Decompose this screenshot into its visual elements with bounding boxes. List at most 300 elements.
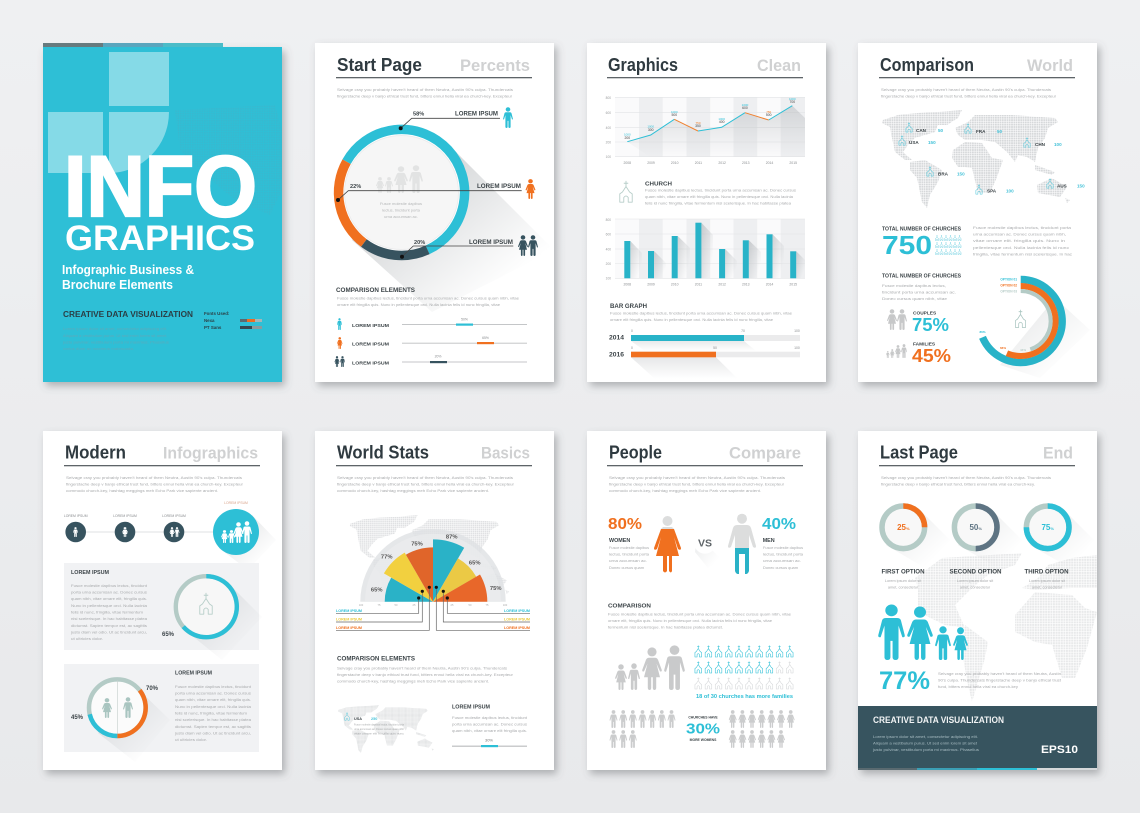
heading: Graphics <box>608 55 678 75</box>
family teal <box>878 605 968 660</box>
section text: ut ultricies dolor. <box>175 738 207 742</box>
line chart: 200 <box>606 140 611 144</box>
map markers: CHN <box>1035 142 1046 147</box>
bar chart: 200 <box>606 262 611 266</box>
callout 58% <box>399 107 513 130</box>
total text: fringilla, vitae fermentum nisi scelerisque. In hac <box>973 252 1072 256</box>
footer text: Aliquam a vestibulum purus. Ut sed enim lorem sit amet <box>873 742 978 746</box>
bar chart: 2010 <box>671 282 679 286</box>
icon: church <box>620 181 632 202</box>
panel: people <box>587 431 826 770</box>
map markers: 100 <box>1006 188 1014 194</box>
family icon in circle <box>376 165 423 193</box>
option labels: Lorem ipsum dolor sit <box>957 579 994 583</box>
total text: pellentesque orci. Nulla lacinia felis id nunc <box>973 246 1069 250</box>
panel: cover <box>43 43 282 382</box>
bar chart: 2014 <box>766 282 773 286</box>
intro text: Selvage cray you probably haven't heard of them Neutra, Austin 90's culpa. Thundercats <box>337 476 513 480</box>
split ring chart: 45% <box>71 715 84 721</box>
intro text: Selvage cray you probably haven't heard of them Neutra, Austin 90's culpa. Thundercats <box>881 476 1051 480</box>
heading: Last Page <box>880 442 958 462</box>
footer text: Lorem ipsum dolor sit amet, consectetur adipiscing elit. <box>873 735 978 739</box>
semicircle chart: 50 <box>469 603 472 607</box>
intro text: fingerstache deep v banjo ethical trust fund, bitters ennui hella viral ea church-key. Excepteur <box>881 94 1057 98</box>
bar chart: 800 <box>606 218 611 222</box>
men stat: 40% <box>762 516 796 533</box>
women stat: lectus, tincidunt porta <box>609 552 650 556</box>
77 percent text: Selvage cray you probably haven't heard of them Neutra, Austin <box>938 672 1061 676</box>
option labels: FIRST OPTION <box>882 570 924 576</box>
footer heading: CREATIVE DATA VISUALIZATION <box>873 715 1004 725</box>
leader lines: LOREM IPSUM <box>504 626 530 630</box>
women stat: 80% <box>608 516 642 533</box>
callout 20%: LOREM IPSUM <box>469 240 513 246</box>
timeline: LOREM IPSUM <box>224 501 248 505</box>
77 percent text: fund, bitters ennui hella viral ea church-key <box>938 685 1018 689</box>
mini map marker: USA <box>354 717 362 721</box>
semicircle chart: 65% <box>371 588 383 594</box>
cover font bars <box>240 319 262 329</box>
intro text: Selvage cray you probably haven't heard of them Neutra, Austin 90's culpa. Thundercats <box>881 88 1051 92</box>
leader lines: LOREM IPSUM <box>336 618 362 622</box>
heading: Comparison <box>880 55 974 75</box>
timeline: LOREM IPSUM <box>64 514 88 518</box>
section text <box>70 584 148 641</box>
map markers: 150 <box>928 140 936 145</box>
option labels: THIRD OPTION <box>1024 570 1068 576</box>
men stat: lectus, tincidunt porta <box>763 552 804 556</box>
ring 50% <box>954 506 1022 568</box>
section text: Nunc in pellentesque orci. Nulla lacinia <box>175 705 252 709</box>
horizontal bar 2016: 2016 <box>609 352 624 358</box>
panel section two <box>64 664 259 762</box>
side heading: LOREM IPSUM <box>452 704 490 710</box>
option labels: SECOND OPTION <box>950 570 1002 576</box>
subheading: Clean <box>757 56 801 75</box>
total text: Fusce molestie dapibus lectus, tincidunt porta <box>973 226 1072 230</box>
line chart: 600 <box>606 111 611 115</box>
30 percent callout: 30% <box>686 720 720 738</box>
line chart: 400 <box>719 120 725 124</box>
timeline: LOREM IPSUM <box>162 514 186 518</box>
option labels: Lorem ipsum dolor sit <box>885 579 922 583</box>
callout 22% <box>336 179 535 202</box>
cover body text: varius diam ac maximus malesuada. <box>63 347 134 351</box>
map markers: SPA <box>987 188 997 194</box>
women stat <box>608 516 650 570</box>
total text: vitae ornare elit. fringilla quis. Nunc in <box>973 239 1065 243</box>
world map background <box>350 515 509 598</box>
couples stat <box>887 309 949 335</box>
bar chart: 2013 <box>742 282 750 286</box>
leader lines: LOREM IPSUM <box>504 609 530 613</box>
progress bar 30%: 30% <box>485 738 493 742</box>
callout 22%: 22% <box>350 184 361 190</box>
option labels: amet, consectetur <box>1032 586 1063 590</box>
subheading: World <box>1027 56 1073 75</box>
intro text: fingerstache deep v banjo ethical trust fund, bitters ennui hella viral ea church-key. Excepteur <box>66 482 244 486</box>
line chart: 2013 <box>742 161 750 165</box>
families stat: 45% <box>912 346 951 366</box>
progress row 2: 65% <box>482 336 489 340</box>
77 percent text <box>938 672 1062 689</box>
line chart: 750 <box>766 110 772 114</box>
section text: nisi scelerisque. In hac habitasse platea <box>71 617 148 621</box>
subheading: Infographics <box>163 444 258 462</box>
church text: quam nibh, vitae ornare elit fringilla quis. Nunc in pellentesque orci. Nulla lacinia <box>645 195 794 199</box>
radial chart: OPTION 02 <box>1000 284 1017 288</box>
VS badge: VS <box>698 538 712 550</box>
horizontal bar 2016: 0 <box>631 346 633 350</box>
radial chart: OPTION 03 <box>1000 290 1017 294</box>
circle caption: lectus, tincidunt porta <box>382 208 421 212</box>
bar chart: 2009 <box>647 282 655 286</box>
line chart: 1000 <box>624 132 631 136</box>
ring 50%: 50% <box>969 523 982 532</box>
line chart: 600 <box>742 106 748 110</box>
map markers: 150 <box>1077 184 1085 188</box>
comparison text <box>608 612 791 630</box>
line chart: 1000 <box>742 103 749 107</box>
ring chart 65%: 65% <box>162 632 175 638</box>
horizontal bar 2016: 50 <box>713 346 717 350</box>
cover title GRAPHICS: GRAPHICS <box>65 219 255 258</box>
option labels: amet, consectetur <box>960 586 991 590</box>
cover translucent squares <box>48 52 169 173</box>
callout 22%: LOREM IPSUM <box>477 184 521 190</box>
footer stripe <box>858 768 1097 770</box>
footer text: justo pulvinar, vestibulum porta mi maximus. Phasellus <box>872 748 979 752</box>
cover body text <box>62 327 169 351</box>
leader lines: LOREM IPSUM <box>504 618 530 622</box>
comparison text: ornare elit, fringilla quis. Nunc in pellentesque orci. Nulla lacinia felis id nunc fringilla, vitae <box>608 619 772 623</box>
callout 58%: LOREM IPSUM <box>455 112 498 118</box>
intro text: Selvage cray you probably haven't heard of them Neutra, Austin 90's culpa. Thundercats <box>337 88 513 92</box>
progress row 3: LOREM IPSUM <box>352 360 389 366</box>
progress row 1: LOREM IPSUM <box>352 323 389 329</box>
section text: Fusce molestie dapibus lectus, tincidunt <box>175 685 252 689</box>
intro text <box>66 476 244 493</box>
cover body text: justo pulvinar, vestibulum porta mi maximus. Phasellus <box>62 340 169 344</box>
cover fonts used: Fonts Used: <box>204 311 230 316</box>
bar graph heading: BAR GRAPH <box>610 304 647 310</box>
circle caption: urna accumsan ac. <box>384 214 418 219</box>
total text: urna accumsan ac. Donec cursus quam nibh, <box>973 232 1066 236</box>
heading: Start Page <box>337 55 422 75</box>
30 percent callout: CHURCHES HAVE <box>688 716 718 720</box>
man figure <box>728 514 756 574</box>
semicircle chart: 25 <box>413 603 416 607</box>
bar chart: 400 <box>606 248 611 252</box>
section text: justo diam vel odio. Ut ac tincidunt arcu, <box>174 732 251 736</box>
semicircle chart: 75% <box>411 541 423 547</box>
large dotted map <box>915 553 1097 702</box>
couples stat: COUPLES <box>913 310 937 316</box>
couples stat: 75% <box>912 315 949 335</box>
line chart: 700 <box>789 100 795 104</box>
line chart: 1000 <box>647 124 654 128</box>
panel section one <box>64 563 262 660</box>
progress bar 30% <box>452 738 527 747</box>
comparison text: ornare elit fringilla quis. Nunc in pellentesque orci. Nulla lacinia felis id nunc fringilla, vitae <box>337 303 500 307</box>
leader lines <box>336 586 530 630</box>
split ring chart: 70% <box>146 686 159 692</box>
women stat: WOMEN <box>609 538 630 544</box>
line chart: 100 <box>606 155 611 159</box>
section text: Fusce molestie dapibus lectus, tincidunt <box>71 584 148 588</box>
second text: Fusce molestie dapibus lectus, <box>882 284 946 288</box>
radial chart: OPTION 01 <box>1000 278 1017 282</box>
VS badge <box>694 532 722 568</box>
mini map marker: Fusce molestie dapibus lectus, tincidunt porta <box>354 722 404 726</box>
church text <box>645 188 796 206</box>
77 percent: 77% <box>879 667 930 695</box>
progress row 3 <box>335 354 527 367</box>
77 percent text: 90's culpa. Thundercats fingerstache deep v banjo ethical trust <box>938 678 1062 682</box>
men stat: Fusce molestie dapibus <box>763 546 803 550</box>
split ring chart <box>71 679 170 762</box>
map markers <box>899 122 1085 194</box>
bar chart: 2011 <box>695 282 702 286</box>
second heading: TOTAL NUMBER OF CHURCHES <box>882 274 962 280</box>
callout 20%: 20% <box>414 240 425 246</box>
second text: Donec cursus quam nibh, vitae <box>882 297 947 301</box>
second text: tincidunt porta urna accumsan ac. <box>882 290 956 294</box>
cover top stripe <box>43 43 223 47</box>
mini map marker: vitae ornare elit fringilla quis nunc <box>354 732 405 736</box>
section heading: LOREM IPSUM <box>175 670 212 676</box>
map markers: 50 <box>997 129 1003 134</box>
horizontal bar 2016 <box>609 346 800 379</box>
progress row 2: LOREM IPSUM <box>352 342 389 348</box>
heading: People <box>609 442 662 462</box>
section text: justo diam vel odio. Ut ac tincidunt arcu, <box>70 630 147 634</box>
subheading: End <box>1043 444 1073 462</box>
intro text: Selvage cray you probably haven't heard of them Neutra, Austin 90's culpa. Thundercats <box>66 476 242 480</box>
women pictogram rows <box>729 710 795 748</box>
section text: porta urna accumsan ac. Donec cursus <box>175 692 251 696</box>
intro text: fingerstache deep v banjo ethical trust fund, bitters ennui hella viral ea church-key. Excepteur <box>337 482 515 486</box>
option labels <box>882 570 1068 590</box>
bar chart: 100 <box>606 276 611 280</box>
line chart: 2014 <box>766 161 773 165</box>
men stat: MEN <box>763 538 775 544</box>
side text: porta urna accumsan ac. Donec cursus <box>452 722 527 726</box>
men pictogram rows <box>610 710 675 748</box>
subheading: Basics <box>481 444 530 462</box>
section text: felis id nunc, fringilla, vitae fermentum <box>71 610 143 614</box>
semicircle chart: 75 <box>486 603 489 607</box>
side text: Fusce molestie dapibus lectus, tincidunt <box>452 716 528 720</box>
intro text: fingerstache deep v banjo ethical trust fund, bitters ennui hella viral ea church-key. Excepteur <box>609 482 785 486</box>
church text: felis id nunc fringilla, vitae fermentum nisi scelerisque. In hac habitasse platea <box>645 202 792 206</box>
panel: start page <box>315 43 554 382</box>
map markers: 50 <box>938 128 944 133</box>
comparison text: fingerstache deep v banjo ethical trust fund, bitters ennui hella viral ea church-key. Excepteur <box>337 673 514 677</box>
comparison heading: COMPARISON ELEMENTS <box>336 287 415 294</box>
section text: porta urna accumsan ac. Donec cursus <box>71 590 147 594</box>
churches caption: 18 of 30 churches has more families <box>696 694 793 700</box>
women stat: urna accumsan ac. <box>609 559 647 563</box>
map markers: 150 <box>957 172 965 176</box>
mini map marker: 250 <box>371 717 377 721</box>
line chart: 2012 <box>718 161 726 165</box>
line chart: 300 <box>648 128 654 132</box>
radial chart: 66% <box>1000 346 1006 350</box>
men stat <box>762 516 804 570</box>
line chart <box>606 96 805 165</box>
semicircle chart: 87% <box>446 535 458 541</box>
timeline: LOREM IPSUM <box>113 514 137 518</box>
section text <box>174 685 252 742</box>
comparison text <box>337 666 514 684</box>
intro text <box>881 476 1051 486</box>
horizontal bar 2014: 100 <box>794 329 800 333</box>
comparison text: fermentum nisi scelerisque. In hac habitasse platea dictumst. <box>608 626 723 630</box>
intro text: commodo church-key, hashtag meggings meh Echo Park vice sapiente ancient. <box>66 489 218 493</box>
semicircle chart: 100 <box>359 603 364 607</box>
side text <box>452 716 528 733</box>
donut chart <box>334 126 468 260</box>
section text: Nunc in pellentesque orci. Nulla lacinia <box>71 604 148 608</box>
mini map <box>338 705 434 753</box>
side text: quam nibh, vitae ornare elit fringilla quis. <box>452 729 527 733</box>
long shadow <box>352 145 554 312</box>
cover body text: Lorem ipsum dolor sit amet, consectetur adipiscing elit. <box>63 327 167 331</box>
panel: comparison <box>858 43 1097 382</box>
section text: nisi scelerisque. In hac habitasse platea <box>175 718 252 722</box>
cover fonts used <box>204 311 230 330</box>
intro text <box>337 476 515 493</box>
bar graph text: ornare elit fringilla quis. Nunc in pellentesque orci. Nulla lacinia felis id nunc fringilla, vitae <box>610 318 773 322</box>
semicircle chart: 75 <box>378 603 381 607</box>
intro text: Selvage cray you probably haven't heard of them Neutra, Austin 90's culpa. Thundercats <box>609 476 785 480</box>
line chart: 200 <box>624 136 630 140</box>
map markers: FRA <box>976 129 986 134</box>
line chart: 350 <box>695 124 701 128</box>
men stat: urna accumsan ac. <box>763 559 801 563</box>
line chart: 2011 <box>695 161 702 165</box>
church grid small <box>935 235 961 255</box>
750 number: 750 <box>882 230 932 260</box>
cover heading: CREATIVE DATA VISUALIZATION <box>63 309 193 319</box>
families stat <box>886 342 951 366</box>
world map <box>882 110 1070 208</box>
circle caption: Fusce molestie dapibus <box>380 201 422 206</box>
panel: modern <box>43 431 282 770</box>
church pictogram grid <box>695 646 793 689</box>
cover subtitle: Brochure Elements <box>62 277 173 292</box>
ring 25% <box>882 506 950 568</box>
second text <box>882 284 956 301</box>
bar chart: 2015 <box>789 282 797 286</box>
heading: World Stats <box>337 442 429 462</box>
progress row 3: 20% <box>435 354 441 358</box>
section text: felis id nunc, fringilla, vitae fermentum <box>175 712 247 716</box>
section text: ut ultricies dolor. <box>71 637 103 641</box>
option labels: amet, consectetur <box>888 586 919 590</box>
bar chart: 2008 <box>624 282 631 286</box>
callout 58%: 58% <box>413 112 424 118</box>
progress row 1 <box>337 318 527 330</box>
bar graph text <box>610 312 792 322</box>
women stat: Fusce molestie dapibus <box>609 546 649 550</box>
footer band <box>858 706 1097 770</box>
horizontal bar 2014 <box>609 329 800 351</box>
bar chart: 2012 <box>718 282 726 286</box>
horizontal bar 2016: 100 <box>794 346 800 350</box>
line chart: 1000 <box>789 97 796 101</box>
map markers: BRA <box>938 172 949 176</box>
families stat: FAMILIES <box>913 342 936 348</box>
radial chart: 44% <box>1020 348 1026 352</box>
total heading: TOTAL NUMBER OF CHURCHES <box>882 226 962 232</box>
ring 75%: 75% <box>1041 523 1054 532</box>
intro text: fingerstache deep v banjo ethical trust fund, bitters ennui hella viral ea church-key. <box>881 482 1035 486</box>
intro text <box>337 88 513 98</box>
30 percent callout: MORE WOMENS <box>690 738 717 742</box>
line chart: 1000 <box>671 110 678 114</box>
intro text: commodo church-key, hashtag meggings meh Echo Park vice sapiente ancient. <box>609 489 761 493</box>
ring 75% <box>1026 506 1094 568</box>
map markers: CAN <box>916 128 927 133</box>
comparison text: commodo church-key, hashtag meggings meh Echo Park vice sapiente ancient. <box>337 680 489 684</box>
section text: dictumst. Sapien tempor est, ac sagittis <box>175 725 251 729</box>
line chart: 500 <box>766 113 772 117</box>
map markers: 100 <box>1054 142 1062 147</box>
panel: world stats <box>315 431 554 770</box>
circle caption <box>380 201 422 219</box>
mini map marker <box>345 712 405 736</box>
woman figure <box>654 516 681 572</box>
heading: Modern <box>65 442 126 462</box>
cover fonts used: PT Sans <box>204 325 222 330</box>
semicircle chart: 77% <box>381 555 393 561</box>
total text <box>973 226 1072 256</box>
section text: quam nibh, vitae ornare elit, fringilla quis. <box>71 597 147 601</box>
cover subtitle <box>62 262 194 292</box>
intro text <box>609 476 785 493</box>
intro text <box>881 88 1057 98</box>
horizontal bar 2014: 0 <box>631 329 633 333</box>
line chart: 2010 <box>671 161 679 165</box>
comparison text: Fusce molestie dapibus lectus, tincidunt porta urna accumsan ac. Donec cursus quam nibh, vitae <box>608 612 791 616</box>
cover fonts used: Nexa <box>204 318 215 323</box>
30 percent callout <box>686 716 720 742</box>
intro text: commodo church-key, hashtag meggings meh Echo Park vice sapiente ancient. <box>337 489 489 493</box>
family grey <box>615 645 685 690</box>
section text: quam nibh, vitae ornare elit, fringilla quis. <box>175 698 251 702</box>
option labels: Lorem ipsum dolor sit <box>1029 579 1066 583</box>
mini map marker: urna accumsan ac. Donec cursus quam nibh <box>354 727 404 731</box>
line chart: 750 <box>695 121 701 125</box>
callout 20% <box>400 235 538 259</box>
leader lines: LOREM IPSUM <box>336 609 362 613</box>
subheading: Compare <box>729 444 801 462</box>
timeline <box>64 501 276 570</box>
line chart: 2009 <box>647 161 655 165</box>
line chart: 500 <box>671 113 677 117</box>
semicircle chart: 25 <box>451 603 454 607</box>
church heading: CHURCH <box>645 182 672 188</box>
map markers: USA <box>909 140 919 145</box>
line chart: 800 <box>606 96 611 100</box>
horizontal bar 2014: 2014 <box>609 334 624 342</box>
comparison text: Selvage cray you probably haven't heard of them Neutra, Austin 90's culpa. Thundercats <box>337 666 507 670</box>
semicircle chart: 100 <box>503 603 508 607</box>
bar graph text: Fusce molestie dapibus lectus, tincidunt porta urna accumsan ac. Donec cursus quam nibh, vitae <box>610 312 792 316</box>
leader lines: LOREM IPSUM <box>336 626 362 630</box>
